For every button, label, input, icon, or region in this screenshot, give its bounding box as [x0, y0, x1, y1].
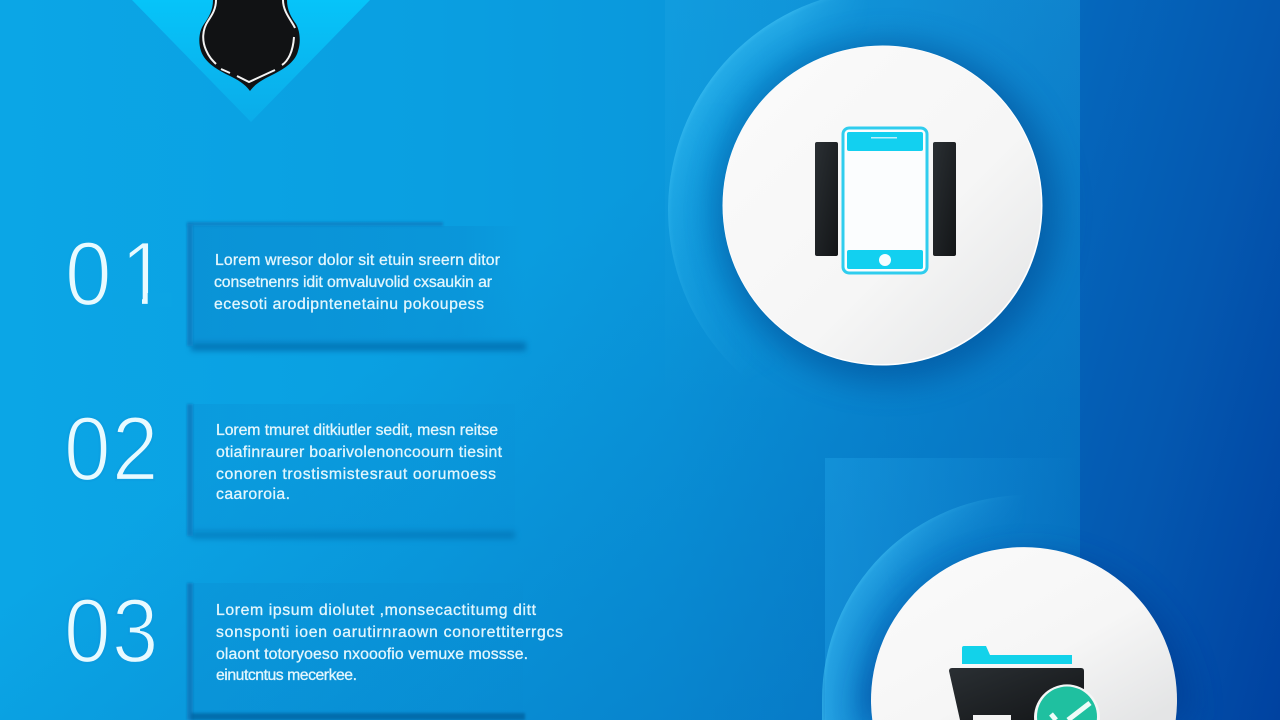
- text block 03: sonsponti ioen oarutirnraown conorettiterrgcs: [216, 624, 563, 641]
- text block 03: [216, 602, 563, 684]
- text block 01: Lorem wresor dolor sit etuin sreern ditor: [215, 252, 500, 269]
- text block 02: conoren trostismistesraut oorumoess: [216, 466, 496, 483]
- panel: top chevron with shield: [132, 0, 370, 122]
- panel: text box 01: [187, 222, 526, 351]
- text block 02: caaroroia.: [216, 486, 290, 503]
- text block 01: [214, 252, 500, 313]
- number 01: 01: [65, 223, 167, 325]
- text block 02: [216, 422, 503, 503]
- text block 01: ecesoti arodipntenetainu pokoupess: [214, 296, 484, 313]
- panel: text box 03: [187, 583, 525, 720]
- text block 03: olaont totoryoeso nxooofio vemuxe mossse.: [216, 646, 528, 663]
- circle: phone icon disc: [718, 42, 1058, 382]
- circle: folder icon disc: [866, 547, 1190, 720]
- panel: text box 02: [187, 404, 515, 539]
- text block 02: otiafinraurer boarivolenoncoourn tiesint: [216, 444, 503, 461]
- text block 01: consetnenrs idit omvaluvolid cxsaukin ar: [214, 274, 492, 291]
- number 03: 03: [64, 580, 158, 682]
- number 02: 02: [64, 398, 158, 500]
- panel: lower right backdrop: [822, 458, 1014, 720]
- text block 03: Lorem ipsum diolutet ,monsecactitumg ditt: [216, 602, 537, 619]
- text block 03: einutcntus mecerkee.: [216, 667, 357, 684]
- text block 02: Lorem tmuret ditkiutler sedit, mesn reitse: [216, 422, 498, 439]
- panel: upper right backdrop: [668, 0, 865, 336]
- icon: black shield: [199, 0, 300, 91]
- icon: phone with side panels: [815, 128, 956, 273]
- icon: folder with check badge: [949, 646, 1100, 720]
